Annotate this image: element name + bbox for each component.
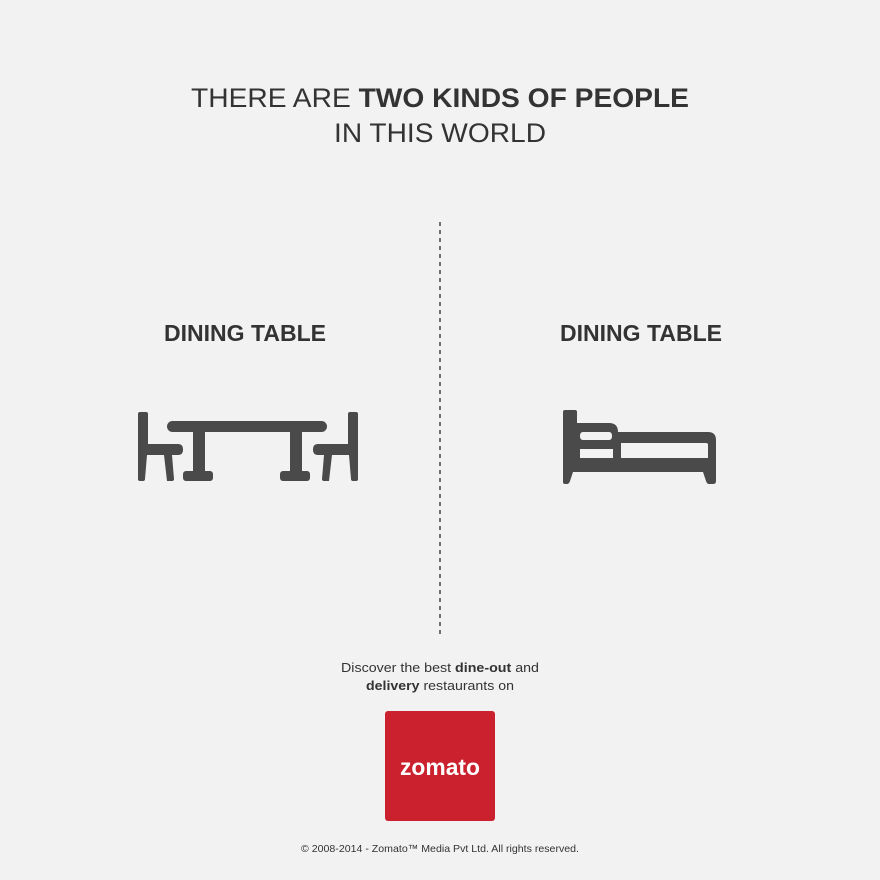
text block: discover — [341, 660, 539, 693]
title: THERE ARE TWO KINDS OF PEOPLE — [191, 83, 689, 113]
icon: bed — [563, 410, 716, 484]
title — [191, 83, 689, 148]
text block: discover: delivery restaurants on — [366, 678, 514, 693]
title: IN THIS WORLD — [334, 118, 546, 148]
logo: zomato — [385, 711, 495, 821]
logo: zomato: zomato — [400, 754, 480, 780]
heading: left: DINING TABLE — [164, 320, 326, 346]
text block: discover: Discover the best dine-out and — [341, 660, 539, 675]
copyright: © 2008-2014 - Zomato™ Media Pvt Ltd. All rights reserved. — [301, 843, 579, 855]
icon: dining table — [138, 412, 358, 481]
heading: right: DINING TABLE — [560, 320, 722, 346]
